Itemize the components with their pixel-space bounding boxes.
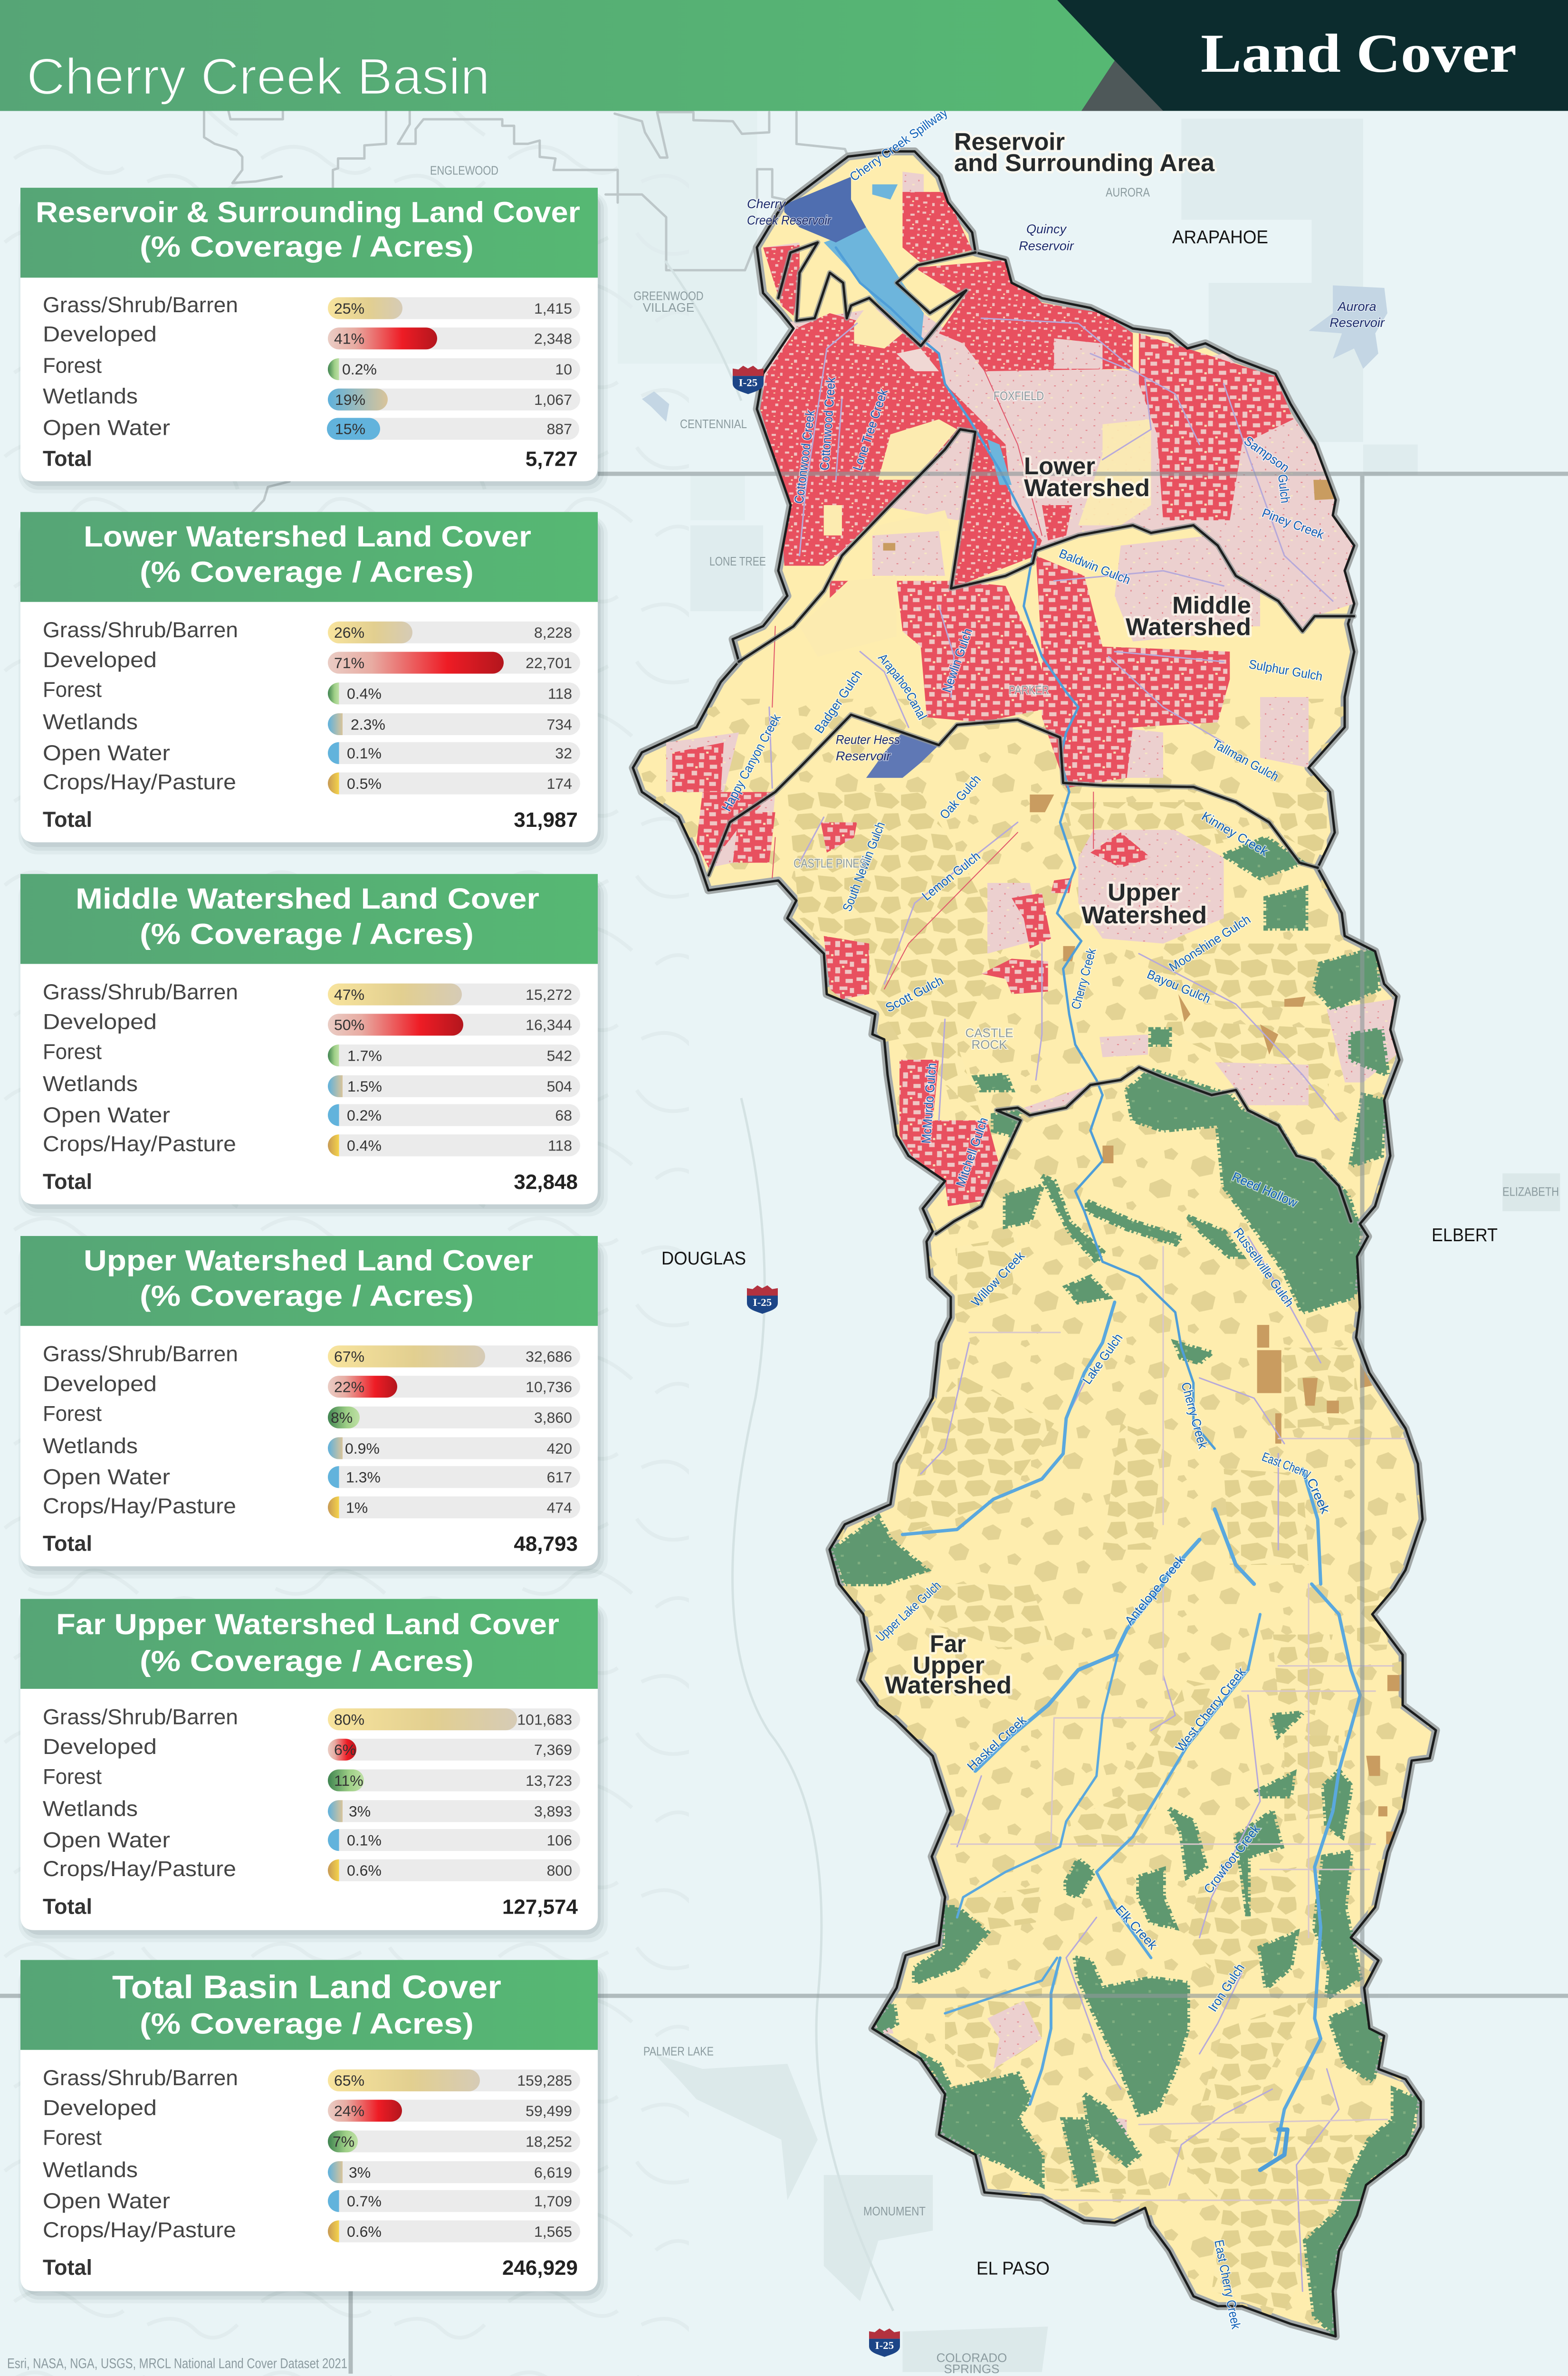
source credit: Esri, NASA, NGA, USGS, MRCL National Land Cover Dataset 2021 [7,2356,347,2371]
row: Developed [43,1010,580,1035]
reservoir labels: Quincy [1026,222,1067,236]
creek labels: Oak Gulch [937,772,984,822]
row: Developed: 22,701 [526,654,572,671]
panel: Upper Watershed Land Cover: (% Coverage / Acres) [140,1280,474,1313]
row: Forest [43,1040,580,1066]
creek labels: Creek [1304,1476,1333,1516]
open water: reservoirs [784,177,1012,778]
reservoir labels: Cherry [747,197,786,211]
row: Open Water [43,1465,580,1489]
row: Wetlands: 2.3% [351,716,385,733]
row: Open Water [43,1103,580,1127]
creek labels: Lemon Gulch [919,849,983,903]
creek labels: Badger Gulch [812,667,865,736]
row: Developed [43,1735,580,1761]
panel: Reservoir and Surrounding Land Cover: Reservoir & Surrounding Land Cover [36,196,580,229]
city labels [430,164,1559,2376]
row: Grass/Shrub/Barren: Grass/Shrub/Barren [43,2066,238,2090]
creek labels: Crowfoot Creek [1201,1822,1263,1896]
row: Grass/Shrub/Barren: 26% [334,624,364,641]
row: Developed: Developed [43,2096,157,2120]
row: Forest: Forest [43,1764,102,1789]
county labels: DOUGLAS [661,1248,746,1269]
row: Developed: 10,736 [526,1379,572,1395]
row: Forest [43,1764,580,1792]
creek labels: Cherry Creek Spillway [847,105,950,184]
creek labels: Haskel Creek [964,1713,1029,1773]
icon: I-25 shield south [869,2328,900,2357]
row: Forest: 7% [333,2133,354,2150]
row: Crops/Hay/Pasture [43,1494,580,1518]
city labels: ENGLEWOOD [430,164,498,178]
row: Total [43,447,578,470]
row: Forest: 3,860 [534,1409,572,1426]
row: Forest: Forest [43,2126,102,2150]
row: Grass/Shrub/Barren: 15,272 [526,986,572,1003]
watershed labels [885,128,1251,1699]
row: Forest: 18,252 [526,2133,572,2150]
county labels [661,227,1498,2279]
panel: Far Upper Watershed Land Cover: Far Upper Watershed Land Cover [56,1609,559,1641]
creek labels: Scott Gulch [883,973,946,1015]
city labels: CASTLE [965,1027,1013,1040]
row: Wetlands: 3% [349,2164,371,2181]
panel: Lower Watershed Land Cover: (% Coverage / Acres) [140,556,474,588]
row: Open Water [43,1828,580,1852]
watershed labels: Watershed [1024,474,1150,501]
reservoir labels: Creek Reservoir [747,213,832,227]
row: Open Water: Open Water [43,1103,170,1127]
city labels: PARKER [1009,684,1049,697]
city labels: LONE TREE [709,555,766,568]
creek labels: Elk Creek [1112,1903,1160,1953]
creek labels: Reed Hollow [1230,1169,1300,1210]
row: Crops/Hay/Pasture [43,1857,580,1881]
row: Forest: 8% [331,1409,353,1426]
creek labels: Piney Creek [1260,506,1326,542]
icon: I-25 shield south: I-25 [875,2339,894,2351]
row: Developed: 6% [334,1741,356,1758]
row: Total: Total [43,1532,92,1556]
row: Crops/Hay/Pasture: 118 [548,1137,572,1154]
row: Developed: Developed [43,1735,157,1759]
creek labels: West Cherry Creek [1173,1665,1249,1754]
crop and hay parcels [883,480,1399,1844]
row: Wetlands [43,1797,580,1822]
creek labels: Upper Lake Gulch [873,1578,944,1644]
row: Wetlands [43,1434,580,1459]
row: Forest: Forest [43,354,102,377]
row: Grass/Shrub/Barren: 8,228 [534,624,572,641]
row: Open Water: 887 [547,421,572,438]
row: Total: Total [43,447,92,470]
creek labels: Antelope Creek [1122,1552,1188,1628]
row: Crops/Hay/Pasture: 800 [547,1862,572,1879]
city labels: SPRINGS [944,2363,999,2376]
row: Developed: 71% [334,654,364,671]
row: Open Water: 1,709 [534,2193,572,2210]
row: Total [43,1532,578,1556]
row: Open Water: 32 [555,745,572,762]
city labels: VILLAGE [643,301,694,315]
creek labels: Tallman Gulch [1210,737,1281,784]
forest areas [833,837,1418,2332]
row: Crops/Hay/Pasture [43,1132,580,1156]
row: Forest [43,678,580,704]
row: Wetlands: Wetlands [43,1797,138,1820]
row: Developed: 2,348 [534,330,572,347]
row: Total: 246,929 [502,2257,578,2280]
creek labels: East Cherry Creek [1212,2239,1243,2330]
watershed labels: Lower [1024,452,1095,479]
panel: Reservoir and Surrounding Land Cover: (% Coverage / Acres) [140,231,474,263]
panel: Upper Watershed Land Cover [19,1236,608,1579]
row: Wetlands: Wetlands [43,2158,138,2182]
row: Grass/Shrub/Barren: 101,683 [517,1711,572,1728]
row: Crops/Hay/Pasture: 174 [547,775,572,792]
row: Open Water: 617 [547,1469,572,1486]
row: Grass/Shrub/Barren [43,1342,580,1367]
reservoir labels: Reservoir [836,749,891,763]
row: Forest [43,2126,580,2152]
city labels: CASTLE PINES [794,857,866,870]
row: Open Water: Open Water [43,741,170,765]
row: Open Water [43,416,579,440]
row: Crops/Hay/Pasture: 0.5% [347,775,382,792]
row: Wetlands [43,384,580,411]
row: Developed: 7,369 [534,1741,572,1758]
watershed labels: Reservoir [954,128,1065,155]
row: Crops/Hay/Pasture: 474 [547,1499,572,1516]
creek labels: Willow Creek [968,1249,1027,1309]
row: Developed [43,648,580,674]
row: Open Water: Open Water [43,1828,170,1852]
row: Open Water: 15% [335,421,365,438]
creek labels: Arapahoe [875,651,916,696]
row: Total: 127,574 [502,1896,578,1918]
row: Developed: Developed [43,648,157,672]
row: Crops/Hay/Pasture: 0.6% [347,1862,382,1879]
city labels: COLORADO [937,2352,1007,2365]
row: Grass/Shrub/Barren [43,293,580,319]
row: Total [43,2256,578,2280]
row: Crops/Hay/Pasture: Crops/Hay/Pasture [43,1857,236,1881]
row: Crops/Hay/Pasture: Crops/Hay/Pasture [43,770,236,794]
row: Developed: 22% [334,1379,364,1395]
row: Crops/Hay/Pasture [43,770,580,795]
watershed labels: Far [930,1630,966,1657]
watershed labels: Upper [1108,879,1180,906]
county labels: ARAPAHOE [1172,227,1268,248]
creek labels: Sampson [1241,433,1292,475]
row: Developed: Developed [43,322,157,346]
watershed labels: and Surrounding Area [954,149,1214,176]
city labels: PALMER LAKE [643,2045,714,2058]
row: Crops/Hay/Pasture [43,2218,580,2242]
row: Grass/Shrub/Barren: 25% [334,300,364,317]
row: Grass/Shrub/Barren: Grass/Shrub/Barren [43,1705,238,1729]
row: Wetlands: 19% [335,391,365,408]
panel: Far Upper Watershed Land Cover [19,1599,608,1942]
row: Wetlands: 734 [547,716,572,733]
panel: Total Basin Land Cover: Total Basin Land Cover [112,1969,501,2005]
creek labels: Canal [903,690,930,722]
panel: Lower Watershed Land Cover: Lower Watershed Land Cover [84,521,531,553]
row: Crops/Hay/Pasture: 1% [346,1499,368,1516]
creek labels: Mitchell Gulch [953,1116,991,1188]
row: Forest: 118 [548,685,572,702]
city labels: AURORA [1106,186,1150,200]
row: Forest: 0.2% [342,361,377,378]
row: Wetlands [43,710,580,735]
icon: I-25 shield north: I-25 [739,377,757,389]
watershed labels: Watershed [1081,901,1207,929]
creek labels: Cherry Creek [1069,947,1099,1011]
creek labels: Gulch [1275,474,1293,504]
city labels: FOXFIELD [994,390,1044,403]
reservoir labels: Reservoir [1329,316,1385,330]
city labels: ROCK [971,1038,1007,1052]
row: Grass/Shrub/Barren: 159,285 [517,2072,572,2089]
row: Wetlands [43,1072,580,1097]
icon: I-25 shield middle [747,1285,778,1314]
row: Total: 32,848 [514,1171,578,1194]
creek labels: Happy Canyon Creek [719,711,784,814]
creek labels: Russellville Gulch [1231,1226,1297,1309]
row: Grass/Shrub/Barren: 65% [334,2072,364,2089]
row: Wetlands [43,2158,580,2183]
panel: Far Upper Watershed Land Cover: (% Coverage / Acres) [140,1645,474,1678]
city labels: CENTENNIAL [680,418,747,431]
row: Open Water [43,2189,580,2213]
reservoir labels: Reuter Hess [836,733,900,747]
row: Developed: 24% [334,2102,364,2119]
row: Open Water: 68 [555,1107,572,1124]
row: Forest [43,1402,580,1428]
panel: Middle Watershed Land Cover: (% Coverage / Acres) [140,918,474,950]
basin outline halo and base colour [633,152,1436,2337]
row: Crops/Hay/Pasture: Crops/Hay/Pasture [43,2218,236,2242]
row: Open Water: 0.2% [347,1107,382,1124]
row: Forest: 10 [555,361,572,378]
row: Grass/Shrub/Barren [43,618,580,643]
panel: Upper Watershed Land Cover: Upper Watershed Land Cover [84,1245,533,1277]
row: Open Water: 0.1% [347,745,382,762]
watershed boundaries [708,242,1354,1234]
creek labels [719,105,1333,2330]
row: Developed [43,1372,580,1398]
row: Forest: Forest [43,1040,102,1063]
row: Wetlands: 6,619 [534,2164,572,2181]
header banner [0,0,1568,111]
row: Total: Total [43,808,92,832]
row: Open Water: Open Water [43,2189,170,2213]
creek labels: McMurdo Gulch [919,1063,939,1144]
row: Wetlands: 3% [349,1803,371,1820]
row: Total: 5,727 [526,448,578,470]
creek labels: Sulphur Gulch [1248,657,1324,683]
row: Total [43,1895,578,1918]
reservoir labels [747,197,1385,763]
subtitle: Land Cover: Land Cover [1201,23,1517,84]
row: Total: Total [43,1169,92,1194]
watershed labels: Watershed [885,1671,1012,1699]
creeks and roads [769,248,1405,2291]
row: Forest: 11% [334,1772,363,1789]
city labels: ELIZABETH [1502,1186,1559,1199]
title: Cherry Creek Basin [27,48,490,105]
creek labels: Cottonwood Creek [817,376,838,471]
row: Grass/Shrub/Barren: Grass/Shrub/Barren [43,980,238,1004]
county labels: ELBERT [1432,1225,1498,1245]
row: Wetlands: 1,067 [534,391,572,408]
city labels: MONUMENT [863,2205,926,2218]
watershed labels: Upper [913,1651,985,1678]
row: Forest: 0.4% [347,685,382,702]
creek labels: Bayou Gulch [1145,967,1213,1006]
panel: Total Basin Land Cover [19,1960,608,2303]
row: Wetlands: 3,893 [534,1803,572,1820]
reservoir labels: Reservoir [1019,239,1074,253]
row: Wetlands: Wetlands [43,1434,138,1458]
row: Total: 31,987 [514,809,578,832]
row: Grass/Shrub/Barren: 67% [334,1348,364,1365]
row: Total [43,808,578,832]
row: Total: Total [43,2256,92,2280]
row: Developed [43,2096,580,2122]
creek labels: Kinney Creek [1199,809,1271,859]
creek labels: South Newlin Gulch [840,820,888,913]
pink developed areas [666,172,1396,2150]
watershed labels: Watershed [1126,613,1251,640]
panel: Total Basin Land Cover: (% Coverage / Acres) [140,2008,474,2040]
row: Grass/Shrub/Barren: Grass/Shrub/Barren [43,293,238,317]
row: Open Water: Open Water [43,416,170,440]
row: Developed: 16,344 [526,1016,572,1034]
row: Wetlands: 1.5% [347,1078,382,1095]
creek labels: East Cherry [1260,1449,1313,1481]
row: Open Water [43,741,580,765]
creek labels: Moonshine Gulch [1166,912,1253,974]
row: Crops/Hay/Pasture: Crops/Hay/Pasture [43,1132,236,1156]
county boundary lines [0,474,1568,2374]
creek labels: Newlin Gulch [939,627,975,694]
reservoir labels: Aurora [1337,299,1376,314]
row: Wetlands: 504 [547,1078,572,1095]
icon: I-25 shield north [733,366,764,394]
row: Open Water: Open Water [43,1465,170,1489]
row: Developed: 41% [334,330,364,347]
row: Developed: 59,499 [526,2102,572,2119]
creek labels: Lake Gulch [1080,1331,1126,1387]
watershed labels: Middle [1172,592,1251,619]
row: Forest: 13,723 [526,1772,572,1789]
row: Open Water: 1.3% [346,1469,381,1486]
row: Crops/Hay/Pasture: 1,565 [534,2223,572,2240]
city labels: GREENWOOD [634,290,703,303]
row: Developed: 50% [334,1016,364,1034]
row: Total [43,1169,578,1194]
row: Total: 48,793 [514,1533,578,1556]
row: Grass/Shrub/Barren: Grass/Shrub/Barren [43,1342,238,1366]
panel: Middle Watershed Land Cover: Middle Watershed Land Cover [76,882,539,915]
row: Crops/Hay/Pasture: 0.4% [347,1137,382,1154]
row: Crops/Hay/Pasture: 0.6% [347,2223,382,2240]
row: Developed: Developed [43,1372,157,1396]
row: Forest: Forest [43,1402,102,1426]
row: Grass/Shrub/Barren [43,2066,580,2091]
map: land cover of the basin [618,172,1449,2353]
row: Open Water: 106 [547,1832,572,1849]
creek labels: Baldwin Gulch [1057,546,1133,587]
row: Forest: 1.7% [347,1047,382,1064]
row: Total: Total [43,1895,92,1918]
row: Wetlands: Wetlands [43,384,138,408]
row: Grass/Shrub/Barren: 47% [334,986,364,1003]
row: Forest: 542 [547,1047,572,1064]
row: Wetlands: 0.9% [345,1440,380,1457]
creek labels: Lone Tree Creek [850,387,890,472]
row: Grass/Shrub/Barren: Grass/Shrub/Barren [43,618,238,642]
panel: Lower Watershed Land Cover [19,512,608,854]
row: Grass/Shrub/Barren [43,980,580,1006]
row: Open Water: 0.1% [347,1832,382,1849]
row: Wetlands: Wetlands [43,710,138,734]
row: Grass/Shrub/Barren [43,1705,580,1730]
creek labels: Cottonwood Creek [792,409,818,505]
yellow clearings in the lower watershed [800,303,1260,657]
creek labels: Iron Gulch [1205,1961,1247,2014]
panel: Reservoir and Surrounding Land Cover [19,188,608,493]
row: Forest [43,354,580,380]
icon: I-25 shield middle: I-25 [753,1296,772,1308]
row: Grass/Shrub/Barren: 1,415 [534,300,572,317]
row: Grass/Shrub/Barren: 32,686 [526,1348,572,1365]
row: Developed: Developed [43,1010,157,1034]
panel: Middle Watershed Land Cover [19,874,608,1217]
row: Developed [43,322,580,349]
county labels: EL PASO [976,2258,1050,2279]
row: Grass/Shrub/Barren: 80% [334,1711,364,1728]
row: Forest: Forest [43,678,102,702]
row: Wetlands: Wetlands [43,1072,138,1096]
red developed areas [672,192,1293,1206]
row: Wetlands: 420 [547,1440,572,1457]
row: Open Water: 0.7% [347,2193,382,2210]
row: Crops/Hay/Pasture: Crops/Hay/Pasture [43,1494,236,1518]
creek labels: Cherry Creek [1178,1381,1210,1450]
basin outline [633,152,1436,2337]
